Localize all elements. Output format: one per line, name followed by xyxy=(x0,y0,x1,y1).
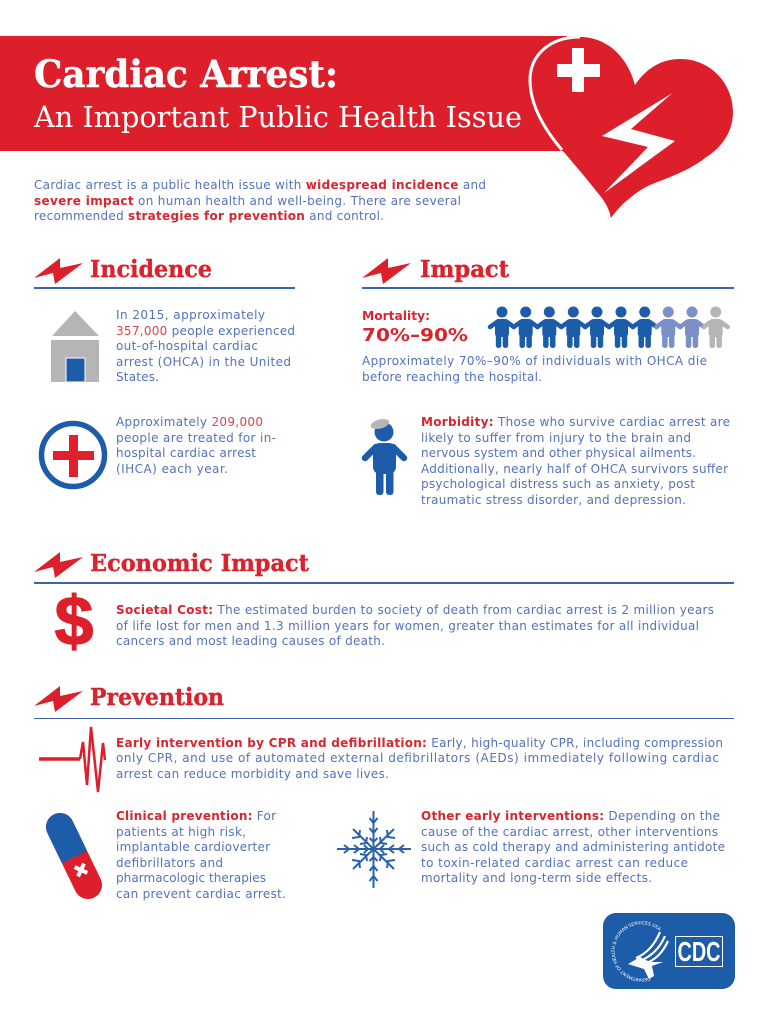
text: morbidity description: Additionally, nearly half of OHCA survivors suffer xyxy=(421,462,728,476)
mortality statistic xyxy=(362,309,468,346)
mortality statistic: Mortality: xyxy=(362,309,430,323)
text: clinical prevention xyxy=(116,809,286,901)
icon: pill xyxy=(60,827,90,885)
text: clinical prevention: patients at high risk, xyxy=(116,825,246,839)
section heading: Incidence xyxy=(34,256,295,289)
text: other early interventions: mortality and long-term side effects. xyxy=(421,871,652,885)
title banner xyxy=(0,36,567,151)
text: in-hospital incidence: (IHCA) each year. xyxy=(116,462,228,476)
icon: heartbeat line xyxy=(39,727,105,792)
text: in-hospital incidence: people are treated for in- xyxy=(116,431,276,445)
text: morbidity description: psychological distress such as anxiety, post xyxy=(421,477,695,491)
text: early intervention: Early intervention by CPR and defibrillation: Early, high-quality CPR, including compression xyxy=(116,736,723,750)
text: morbidity description: Morbidity: Those who survive cardiac arrest are xyxy=(421,415,730,429)
icon: heart with cross and lightning bolt xyxy=(530,37,733,218)
text: clinical prevention: defibrillators and xyxy=(116,856,223,870)
text: out-of-hospital incidence: 357,000 people experienced xyxy=(116,324,295,338)
icon: house xyxy=(51,311,99,382)
text: other early interventions: cause of the cardiac arrest, other interventions xyxy=(421,825,718,839)
title banner: An Important Public Health Issue xyxy=(33,100,522,134)
text: clinical prevention: implantable cardioverter xyxy=(116,840,270,854)
text: clinical prevention: pharmacologic therapies xyxy=(116,871,266,885)
section heading: Prevention xyxy=(34,684,734,719)
icon: medical cross in circle xyxy=(42,424,104,486)
text: societal cost: of life lost for men and 1.3 million years for women, greater than estimates for all individual xyxy=(116,619,699,633)
section heading: Prevention: Prevention xyxy=(90,684,224,711)
section heading: Incidence: Incidence xyxy=(90,256,212,283)
pictogram: ten people xyxy=(490,306,728,348)
text: early intervention: arrest can reduce morbidity and save lives. xyxy=(116,767,389,781)
text: out-of-hospital incidence: In 2015, approximately xyxy=(116,308,265,322)
title banner: Cardiac Arrest: xyxy=(34,52,338,96)
text: societal cost xyxy=(116,603,714,648)
text: out-of-hospital incidence: arrest (OHCA) in the United xyxy=(116,355,291,369)
text: clinical prevention: can prevent cardiac arrest. xyxy=(116,887,286,901)
text: out-of-hospital incidence: out-of-hospital cardiac xyxy=(116,339,258,353)
text: mortality description xyxy=(362,354,707,384)
text: other early interventions: such as cold therapy and administering antidote xyxy=(421,840,725,854)
intro text xyxy=(34,178,486,223)
text: early intervention xyxy=(116,736,723,781)
text: morbidity description: likely to suffer from injury to the brain and xyxy=(421,431,691,445)
mortality statistic: 70%–90% xyxy=(362,325,468,346)
text: other early interventions: to toxin-related cardiac arrest can reduce xyxy=(421,856,688,870)
text: societal cost: Societal Cost: The estimated burden to society of death from cardiac arrest is 2 million years xyxy=(116,603,714,617)
intro text: Cardiac arrest is a public health issue with widespread incidence and xyxy=(34,178,486,192)
text: in-hospital incidence: Approximately 209,000 xyxy=(116,415,263,429)
text: in-hospital incidence: hospital cardiac arrest xyxy=(116,446,256,460)
icon: snowflake xyxy=(337,811,411,888)
text: mortality description: before reaching the hospital. xyxy=(362,370,542,384)
text: in-hospital incidence xyxy=(116,415,276,476)
section heading: Economic Impact: Economic Impact xyxy=(90,550,309,577)
icon: injured person xyxy=(365,417,404,495)
text: clinical prevention: Clinical prevention: For xyxy=(116,809,276,823)
section heading: Impact xyxy=(362,256,734,289)
text: morbidity description: traumatic stress disorder, and depression. xyxy=(421,493,686,507)
text: out-of-hospital incidence: States. xyxy=(116,370,159,384)
intro text: severe impact on human health and well-being. There are several xyxy=(34,194,461,208)
text: early intervention: only CPR, and use of automated external defibrillators (AEDs) immediately following cardiac xyxy=(116,751,719,765)
text: other early interventions xyxy=(421,809,725,885)
intro text: recommended strategies for prevention and control. xyxy=(34,209,384,223)
text: mortality description: Approximately 70%–90% of individuals with OHCA die xyxy=(362,354,707,368)
icon: dollar sign: $ xyxy=(55,582,93,660)
section heading: Economic Impact xyxy=(34,550,734,584)
text: morbidity description: nervous system and other physical ailments. xyxy=(421,446,696,460)
logo: HHS and CDC: CDC xyxy=(678,936,720,967)
text: societal cost: cancers and most leading causes of death. xyxy=(116,634,385,648)
text: out-of-hospital incidence xyxy=(116,308,295,384)
logo: HHS and CDC xyxy=(603,913,735,989)
section heading: Impact: Impact xyxy=(420,256,509,283)
text: morbidity description xyxy=(421,415,730,507)
logo: HHS and CDC: DEPARTMENT OF HEALTH & HUMAN SERVICES USA xyxy=(611,921,660,982)
text: other early interventions: Other early interventions: Depending on the xyxy=(421,809,720,823)
